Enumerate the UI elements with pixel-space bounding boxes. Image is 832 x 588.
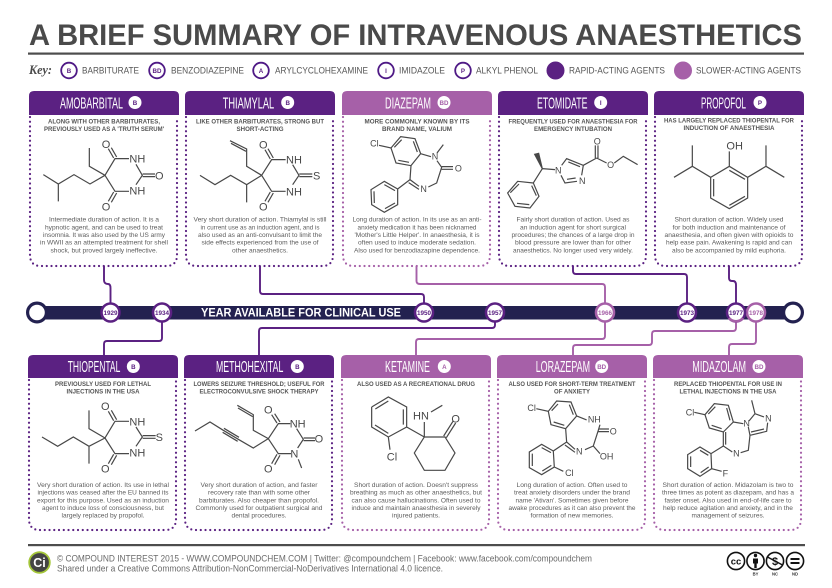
panel: etomidate: I bbox=[600, 100, 602, 107]
panel: etomidate: FREQUENTLY USED FOR ANAESTHESIA FOR bbox=[508, 118, 638, 125]
panel: thiopental: THIOPENTAL bbox=[68, 359, 121, 376]
molecule: ketamine: HN bbox=[413, 410, 429, 422]
footer text: © COMPOUND INTEREST 2015 - WWW.COMPOUNDCHEM.COM | Twitter: @compoundchem | Facebook: www.facebook.com/compoundchem bbox=[57, 554, 592, 564]
molecule: amobarbital: NH bbox=[129, 185, 145, 197]
molecule: etomidate: N bbox=[555, 166, 562, 176]
panel: thiopental: injections was ceased after the EU banned its bbox=[38, 490, 168, 497]
panel: thiopental: agent to induce loss of consciousness, but bbox=[42, 505, 164, 512]
key legend: BENZODIAZEPINE bbox=[171, 66, 244, 76]
panel: lorazepam: LORAZEPAM bbox=[536, 359, 590, 376]
key legend: B bbox=[67, 68, 72, 75]
footer text: Shared under a Creative Commons Attribution-NonCommercial-NoDerivatives International 4.0 licence. bbox=[57, 564, 443, 574]
panel: etomidate: Fairly short duration of action. Used as bbox=[516, 217, 630, 224]
year marker 1973: 1973 bbox=[680, 310, 694, 317]
connectors: timeline to bottom panels bbox=[104, 321, 756, 356]
panel: amobarbital: insomnia. It was also used by the US army bbox=[43, 232, 166, 239]
panel: thiamylal: B bbox=[285, 100, 290, 107]
molecule: ketamine: O bbox=[451, 414, 460, 426]
panel: ketamine: induce and maintain anaesthesia in severely bbox=[352, 505, 481, 512]
molecule: methohexital: O bbox=[315, 434, 324, 446]
licence icons: $ bbox=[772, 556, 778, 568]
panel: methohexital: B bbox=[295, 364, 300, 371]
molecule: thiamylal: NH bbox=[286, 186, 302, 198]
key legend: RAPID-ACTING AGENTS bbox=[569, 66, 665, 76]
panel: midazolam: management of seizures. bbox=[692, 512, 765, 520]
panel: lorazepam: awake procedures as it can also prevent the bbox=[508, 505, 636, 512]
panel: methohexital: ELECTROCONVULSIVE SHOCK THERAPY bbox=[200, 388, 319, 396]
molecule: methohexital: O bbox=[264, 464, 273, 476]
panel: propofol: P bbox=[758, 100, 762, 107]
panel: midazolam: faster onset. Also used in end-of-life care to bbox=[664, 497, 792, 504]
panel: lorazepam: formation of new memories. bbox=[530, 512, 614, 520]
panel: lorazepam: Long duration of action. Often used to bbox=[516, 482, 628, 489]
panel: midazolam: Short duration of action. Midazolam is two to bbox=[662, 482, 794, 489]
panel: ketamine: injured patients. bbox=[392, 512, 440, 520]
year marker 1977: 1977 bbox=[729, 310, 743, 317]
molecule: methohexital bbox=[195, 404, 324, 476]
panel: etomidate: procedures; the chances of a large drop in bbox=[512, 232, 635, 239]
panel: midazolam: MIDAZOLAM bbox=[692, 359, 746, 376]
molecule: lorazepam bbox=[527, 401, 617, 478]
panel: methohexital: LOWERS SEIZURE THRESHOLD; USEFUL FOR bbox=[194, 381, 325, 388]
panel: amobarbital: ALONG WITH OTHER BARBITURATES, bbox=[48, 118, 160, 125]
molecule: thiamylal: NH bbox=[286, 155, 302, 167]
panel: midazolam bbox=[653, 355, 803, 530]
molecule: midazolam: N bbox=[765, 414, 772, 424]
panel: amobarbital bbox=[29, 91, 179, 266]
year marker 1957 bbox=[486, 304, 504, 322]
panel: thiopental: export for this purpose. Used as an induction bbox=[37, 497, 170, 504]
molecule: amobarbital: O bbox=[102, 201, 111, 213]
panel: ketamine: Short duration of action. Doesn't suppress bbox=[354, 482, 478, 489]
panel: midazolam: REPLACED THIOPENTAL FOR USE IN bbox=[674, 381, 782, 388]
panel: lorazepam: BD bbox=[597, 364, 607, 371]
molecule: lorazepam: Cl bbox=[565, 468, 574, 478]
panel: thiopental: B bbox=[131, 364, 136, 371]
key legend: BARBITURATE bbox=[82, 66, 139, 76]
key legend bbox=[28, 62, 801, 80]
panel: etomidate: blood pressure are lower than for other bbox=[515, 240, 631, 247]
panel: amobarbital: PREVIOUSLY USED AS A 'TRUTH SERUM' bbox=[44, 126, 164, 133]
year marker 1934: 1934 bbox=[155, 310, 169, 317]
molecule: lorazepam: N bbox=[576, 446, 583, 456]
year marker 1978 bbox=[747, 304, 765, 322]
molecule: etomidate: O bbox=[594, 137, 601, 147]
molecule: diazepam: N bbox=[432, 152, 438, 162]
panel: propofol: INDUCTION OF ANAESTHESIA bbox=[684, 125, 775, 132]
panel: propofol: for both induction and maintenance of bbox=[672, 224, 786, 231]
molecule: amobarbital bbox=[43, 139, 164, 213]
year marker 1957: 1957 bbox=[488, 310, 502, 317]
panel: lorazepam bbox=[497, 355, 647, 530]
panel: methohexital: METHOHEXITAL bbox=[216, 359, 284, 376]
panel: propofol: anaesthesia, and often given with opioids to bbox=[664, 232, 794, 239]
panel: amobarbital: AMOBARBITAL bbox=[60, 96, 123, 112]
panel: diazepam: anxiety medication it has been nicknamed bbox=[358, 224, 477, 231]
licence icons: NC bbox=[772, 572, 778, 576]
key legend: IMIDAZOLE bbox=[399, 66, 445, 76]
key legend: P bbox=[461, 68, 465, 75]
panel: methohexital: barbiturates. Also cheaper than propofol. bbox=[199, 497, 319, 504]
molecule: methohexital: N bbox=[290, 449, 298, 461]
panel: ketamine: KETAMINE bbox=[385, 359, 430, 376]
timeline bar bbox=[28, 303, 802, 322]
molecule: midazolam: Cl bbox=[686, 407, 694, 417]
year marker 1973 bbox=[678, 304, 696, 322]
molecule: etomidate: N bbox=[579, 176, 586, 186]
panel: thiamylal bbox=[185, 91, 335, 266]
molecule: methohexital: O bbox=[264, 404, 273, 416]
year marker 1929: 1929 bbox=[103, 310, 118, 317]
molecule: diazepam bbox=[370, 137, 462, 212]
panel: propofol bbox=[654, 91, 804, 266]
panel: lorazepam: OF ANXIETY bbox=[554, 388, 590, 396]
panel: methohexital: recovery rate than with some other bbox=[208, 490, 310, 497]
footer text bbox=[57, 554, 592, 574]
panel: diazepam: 'Mother's Little Helper'. In anaesthesia, it is bbox=[354, 232, 480, 239]
molecule: midazolam bbox=[686, 400, 772, 479]
panel: lorazepam: name 'Ativan'. Sometimes given before bbox=[516, 497, 629, 504]
panel: ketamine: ALSO USED AS A RECREATIONAL DRUG bbox=[357, 381, 475, 388]
molecule: ketamine: Cl bbox=[387, 452, 397, 464]
key legend: SLOWER-ACTING AGENTS bbox=[696, 66, 801, 76]
panel: amobarbital: Intermediate duration of action. It is a bbox=[49, 217, 160, 224]
panel: etomidate: an induction agent for short surgical bbox=[520, 224, 626, 231]
key legend: BD bbox=[153, 68, 162, 75]
molecule: midazolam: N bbox=[733, 449, 740, 459]
molecule: thiamylal bbox=[200, 140, 320, 213]
molecule: thiopental: O bbox=[101, 401, 110, 413]
molecule: propofol: OH bbox=[726, 141, 743, 153]
key legend: ARYLCYCLOHEXAMINE bbox=[275, 66, 368, 76]
molecule: thiopental bbox=[42, 401, 163, 476]
panel: etomidate bbox=[498, 91, 648, 266]
molecule: midazolam: N bbox=[743, 419, 750, 429]
panel: etomidate: anaesthetics. No longer used very widely. bbox=[513, 247, 633, 254]
panel: diazepam: MORE COMMONLY KNOWN BY ITS bbox=[364, 118, 470, 125]
panel: diazepam: Long duration of action. In its use as an anti- bbox=[352, 217, 482, 224]
panel: amobarbital: hypnotic agent, and can be used to treat bbox=[45, 224, 163, 231]
year marker 1950: 1950 bbox=[417, 310, 431, 317]
molecule: etomidate: O bbox=[607, 160, 614, 170]
panel: thiamylal: THIAMYLAL bbox=[223, 96, 274, 112]
molecule: thiamylal: O bbox=[259, 140, 268, 152]
molecule: diazepam: N bbox=[420, 184, 427, 194]
molecule: lorazepam: Cl bbox=[527, 403, 536, 413]
molecule: amobarbital: O bbox=[102, 139, 111, 151]
panel: thiamylal: SHORT-ACTING bbox=[236, 126, 284, 133]
molecule: diazepam: O bbox=[455, 163, 462, 173]
panel: thiamylal: side effects experienced from the use of bbox=[202, 240, 319, 247]
molecule: thiopental: O bbox=[101, 464, 110, 476]
year marker 1934 bbox=[153, 304, 171, 322]
panel: amobarbital: in WWII as an attempted treatment for shell bbox=[40, 240, 168, 247]
timeline bar: YEAR AVAILABLE FOR CLINICAL USE bbox=[201, 306, 401, 320]
panel: ketamine: A bbox=[442, 364, 447, 371]
year marker 1929 bbox=[102, 304, 120, 322]
panel: diazepam: DIAZEPAM bbox=[385, 96, 431, 112]
connectors: top panels to timeline bbox=[104, 266, 736, 303]
key legend: I bbox=[385, 68, 387, 75]
panel: diazepam: BD bbox=[440, 100, 449, 107]
panel: thiopental: largely replaced by propofol. bbox=[62, 512, 145, 520]
molecule: thiopental: NH bbox=[129, 416, 145, 428]
panel: diazepam bbox=[342, 91, 492, 266]
panel: ketamine bbox=[341, 355, 491, 530]
key legend: ALKYL PHENOL bbox=[476, 66, 538, 76]
panel: amobarbital: B bbox=[133, 100, 138, 107]
panel: propofol: also be accompanied by mild euphoria. bbox=[672, 247, 786, 254]
molecule: etomidate bbox=[508, 137, 638, 208]
molecule: methohexital: NH bbox=[290, 419, 306, 431]
panel: thiamylal: in current use as an induction agent, and is bbox=[200, 224, 320, 231]
licence icons bbox=[727, 552, 804, 576]
molecule: thiopental: NH bbox=[129, 447, 145, 459]
molecule: thiamylal: O bbox=[259, 201, 268, 213]
panel: amobarbital: shock, but proved largely ineffective. bbox=[50, 247, 158, 254]
panel: lorazepam: ALSO USED FOR SHORT-TERM TREATMENT bbox=[508, 381, 636, 388]
panel: propofol: HAS LARGELY REPLACED THIOPENTAL FOR bbox=[664, 118, 794, 124]
key legend: A bbox=[259, 68, 264, 75]
panel: midazolam: help reduce agitation and anxiety, and in the bbox=[663, 505, 794, 512]
year marker 1966: 1966 bbox=[598, 310, 612, 317]
panel: etomidate: ETOMIDATE bbox=[537, 96, 588, 112]
panel: thiopental: Very short duration of action. Its use in lethal bbox=[37, 482, 169, 489]
panel: methohexital: dental procedures. bbox=[232, 512, 287, 520]
panel: thiopental: PREVIOUSLY USED FOR LETHAL bbox=[55, 381, 151, 388]
molecule: lorazepam: NH bbox=[588, 415, 601, 425]
panel: midazolam: LETHAL INJECTIONS IN THE USA bbox=[680, 388, 777, 396]
panel: etomidate: EMERGENCY INTUBATION bbox=[534, 126, 612, 133]
panel: methohexital: Commonly used for outpatient surgical and bbox=[196, 505, 323, 512]
panel: ketamine: breathing as much as other anaesthetics, but bbox=[350, 490, 482, 497]
molecule: midazolam: F bbox=[723, 469, 729, 479]
panel: lorazepam: treat anxiety disorders under the brand bbox=[514, 490, 631, 497]
licence icons: cc bbox=[731, 556, 741, 568]
panel: diazepam: often used to induce moderate sedation. bbox=[358, 240, 476, 247]
molecule: diazepam: Cl bbox=[370, 139, 379, 149]
molecule: ketamine bbox=[372, 397, 460, 470]
panel: propofol: Short duration of action. Widely used bbox=[674, 217, 784, 224]
year marker 1978: 1978 bbox=[749, 310, 763, 317]
year marker 1977 bbox=[727, 304, 745, 322]
molecule: lorazepam: O bbox=[610, 426, 617, 436]
molecule: thiopental: S bbox=[156, 432, 163, 444]
logo: compound interest bbox=[29, 552, 50, 573]
molecule: thiamylal: S bbox=[313, 170, 320, 182]
panel: thiopental: INJECTIONS IN THE USA bbox=[66, 388, 140, 396]
year marker 1966 bbox=[596, 304, 614, 322]
panel: ketamine: can also cause hallucinations. Often used to bbox=[352, 497, 481, 504]
panel: thiamylal: other anaesthetics. bbox=[232, 247, 288, 254]
year marker 1950 bbox=[415, 304, 433, 322]
molecule: propofol bbox=[674, 141, 784, 209]
panel: methohexital: Very short duration of action, and faster bbox=[200, 482, 318, 489]
molecule: amobarbital: O bbox=[155, 170, 164, 182]
panel: midazolam: three times as potent as diazepam, and has a bbox=[662, 490, 795, 497]
key legend: Key: bbox=[28, 62, 52, 77]
logo: compound interest: Ci bbox=[33, 556, 46, 570]
panel: thiamylal: also used as an anti-convulsant to limit the bbox=[198, 232, 323, 239]
panel: propofol: PROPOFOL bbox=[701, 96, 746, 112]
molecule: amobarbital: NH bbox=[129, 154, 145, 166]
panel: thiamylal: Very short duration of action. Thiamylal is still bbox=[194, 217, 326, 224]
panel: diazepam: Also used for benzodiazapine dependence. bbox=[354, 247, 480, 254]
panel: propofol: help ease pain. Awakening is rapid and can bbox=[666, 240, 793, 247]
licence icons: BY bbox=[753, 572, 759, 576]
licence icons: ND bbox=[792, 572, 798, 576]
molecule: lorazepam: OH bbox=[600, 452, 613, 462]
panel: methohexital bbox=[184, 355, 334, 530]
panel: thiamylal: LIKE OTHER BARBITURATES, STRONG BUT bbox=[196, 118, 325, 125]
title: A BRIEF SUMMARY OF INTRAVENOUS ANAESTHETICS bbox=[29, 19, 802, 52]
panel: thiopental bbox=[28, 355, 178, 530]
panel: diazepam: BRAND NAME, VALIUM bbox=[382, 126, 452, 133]
panel: midazolam: BD bbox=[755, 364, 764, 371]
